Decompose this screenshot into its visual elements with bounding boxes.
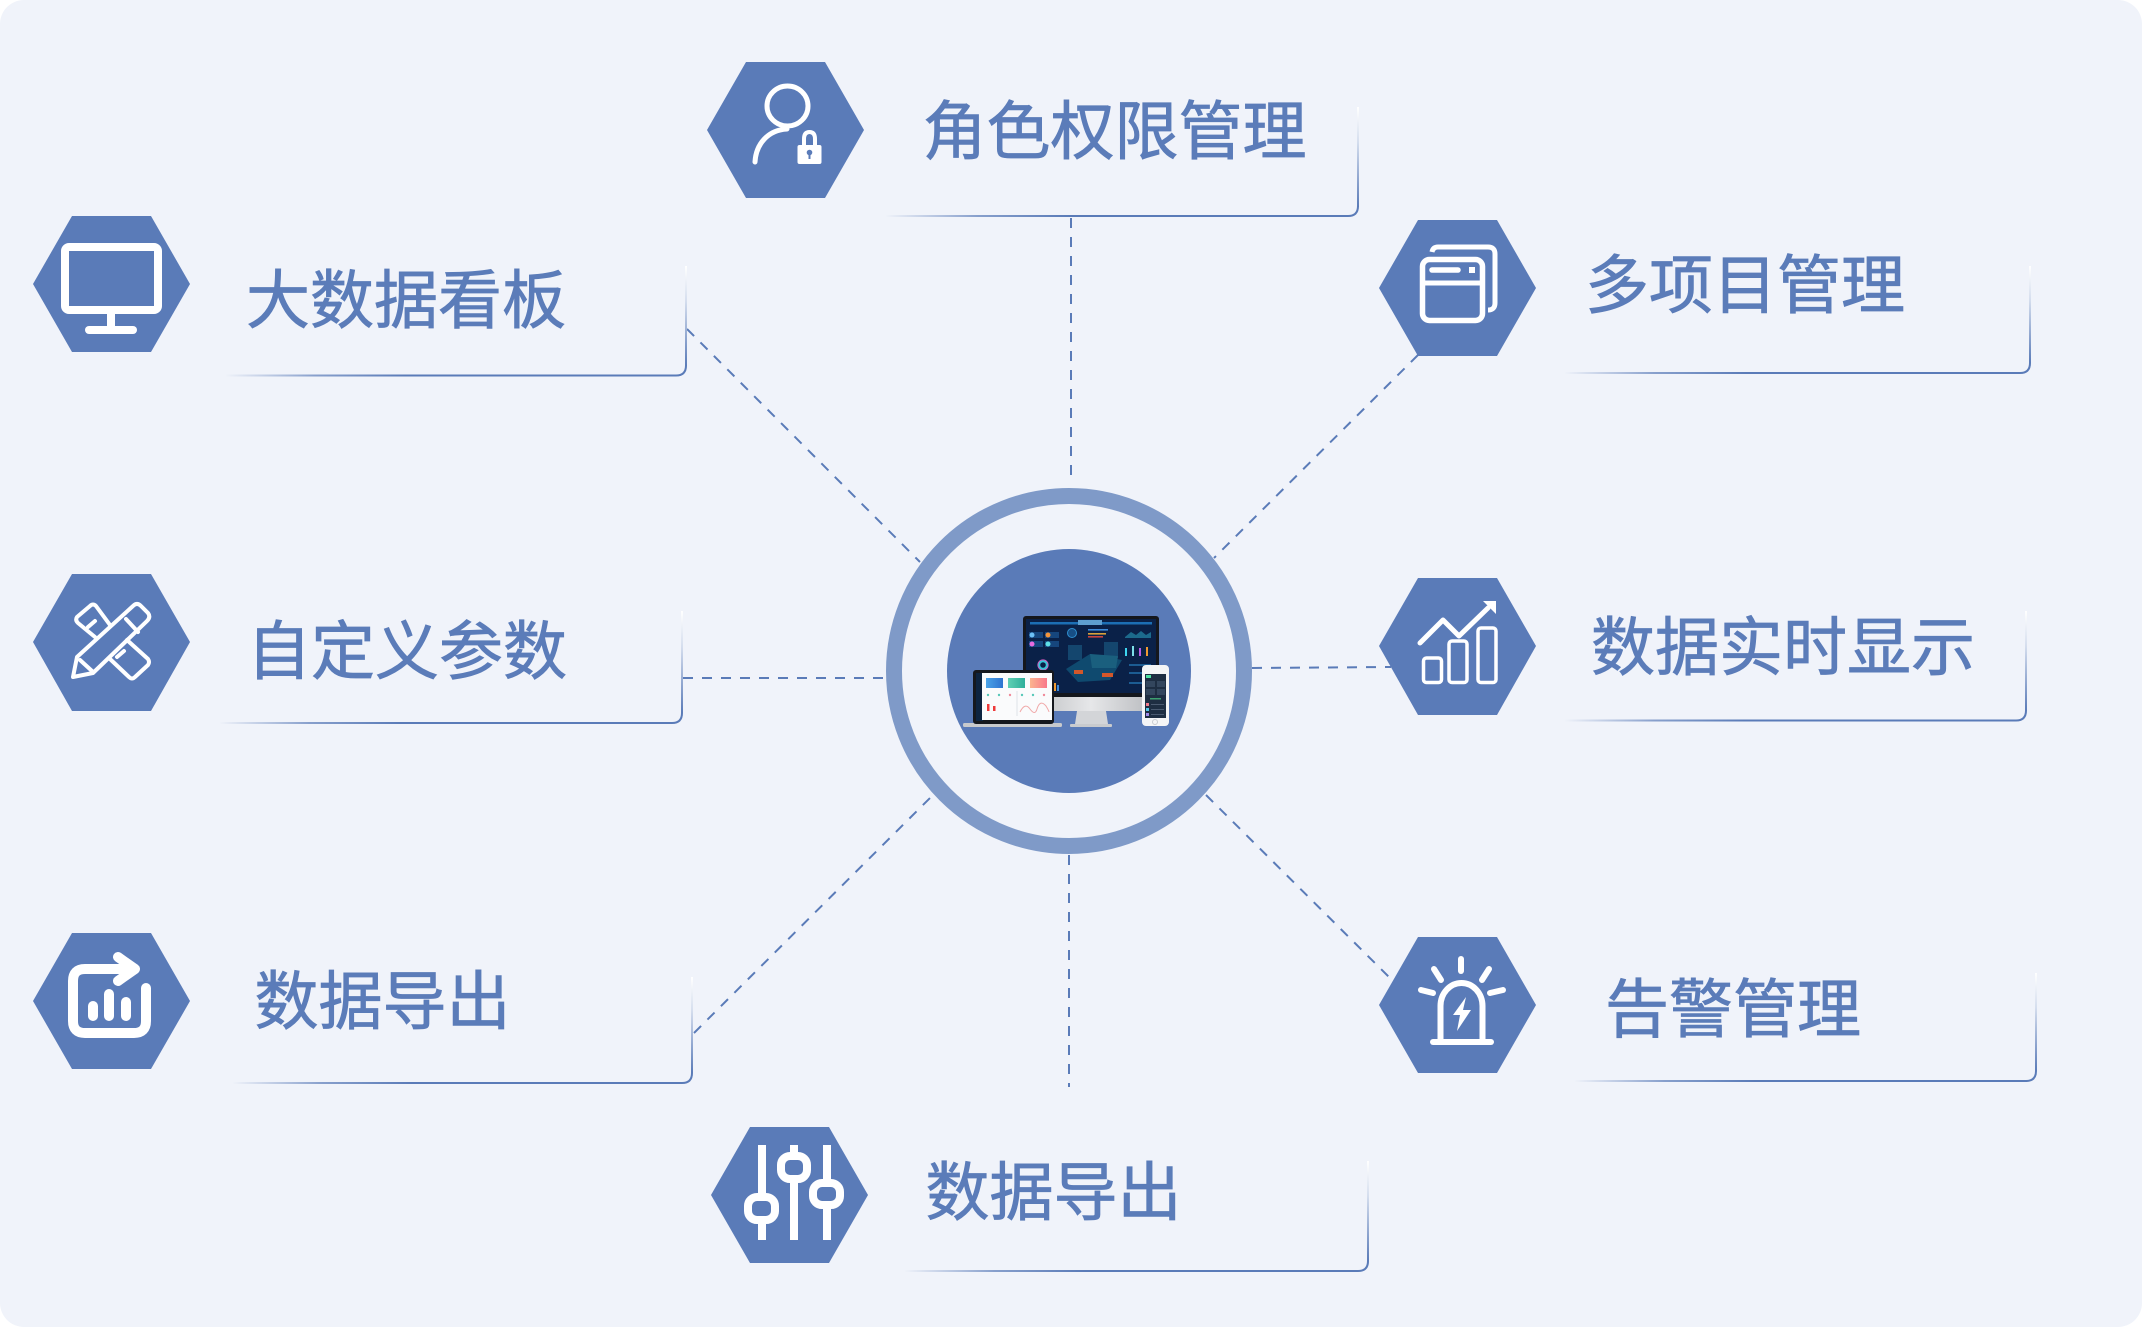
card border xyxy=(225,266,687,376)
label: 告警管理 xyxy=(1605,974,1861,1046)
card border xyxy=(1564,266,2031,374)
feature: custom parameters xyxy=(33,574,683,724)
outer ring xyxy=(894,496,1244,846)
hexagon with sliders icon xyxy=(711,1127,868,1263)
hexagon with user lock icon xyxy=(707,62,864,198)
label: 多项目管理 xyxy=(1585,250,1905,322)
feature: data export left xyxy=(33,933,693,1084)
card border xyxy=(885,107,1359,217)
illustration: phone xyxy=(1142,665,1169,726)
label: 自定义参数 xyxy=(247,616,567,688)
hexagon with monitor icon xyxy=(33,216,190,352)
card border xyxy=(219,611,683,724)
dashed connector lines xyxy=(683,218,1418,1087)
feature: multi-project management xyxy=(1379,220,2031,374)
label: 数据实时显示 xyxy=(1591,612,1975,684)
feature: big data dashboard xyxy=(33,216,687,376)
card border xyxy=(1574,973,2037,1082)
card border xyxy=(232,977,693,1084)
illustration: desktop monitor dashboard xyxy=(1023,616,1159,727)
illustration: laptop xyxy=(963,670,1062,727)
card border xyxy=(1564,611,2027,722)
hexagon with windows icon xyxy=(1379,220,1536,356)
label: 角色权限管理 xyxy=(922,96,1306,168)
feature: alarm management xyxy=(1379,937,2037,1082)
card border xyxy=(904,1161,1369,1272)
label: 大数据看板 xyxy=(246,265,566,337)
inner disc xyxy=(947,549,1191,793)
hexagon with export chart icon xyxy=(33,933,190,1069)
feature: data export bottom xyxy=(711,1127,1369,1272)
feature: real-time data display xyxy=(1379,578,2027,722)
hexagon with alarm light icon xyxy=(1379,937,1536,1073)
hexagon with growth chart icon xyxy=(1379,578,1536,715)
label: 数据导出 xyxy=(254,966,510,1038)
label: 数据导出 xyxy=(926,1157,1182,1229)
feature: role permission management xyxy=(707,62,1359,217)
center hub with devices xyxy=(894,496,1244,846)
hexagon with ruler and pencil icon xyxy=(33,574,190,711)
